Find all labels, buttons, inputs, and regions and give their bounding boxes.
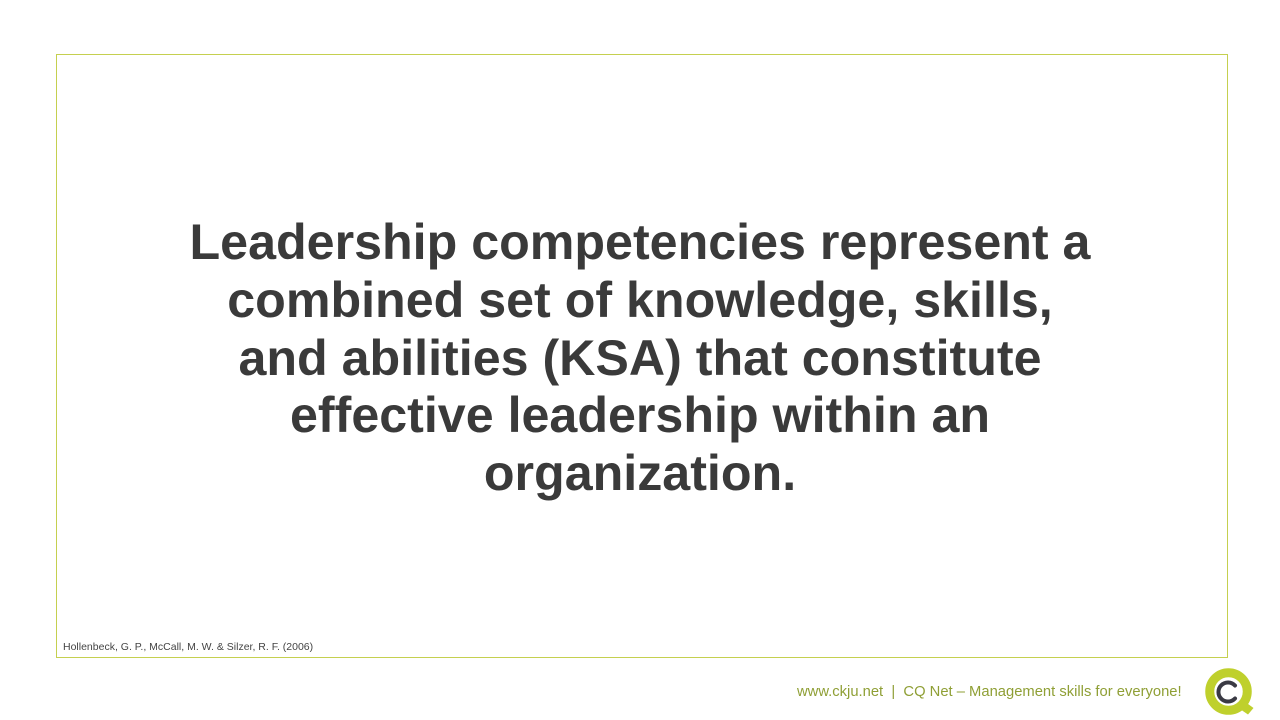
icon: CQ logo (1205, 668, 1254, 715)
citation: Hollenbeck, G. P., McCall, M. W. & Silzer, R. F. (2006) (63, 641, 313, 653)
headline statement: and abilities (KSA) that constitute (238, 330, 1042, 386)
headline statement: organization. (484, 445, 796, 501)
footer text: www.ckju.net | CQ Net – Management skills for everyone! (797, 684, 1182, 700)
headline statement: effective leadership within an (290, 387, 990, 443)
headline statement (190, 214, 1091, 501)
headline statement: combined set of knowledge, skills, (227, 272, 1053, 328)
headline statement: Leadership competencies represent a (190, 214, 1090, 270)
panel: content frame (56, 54, 1228, 658)
